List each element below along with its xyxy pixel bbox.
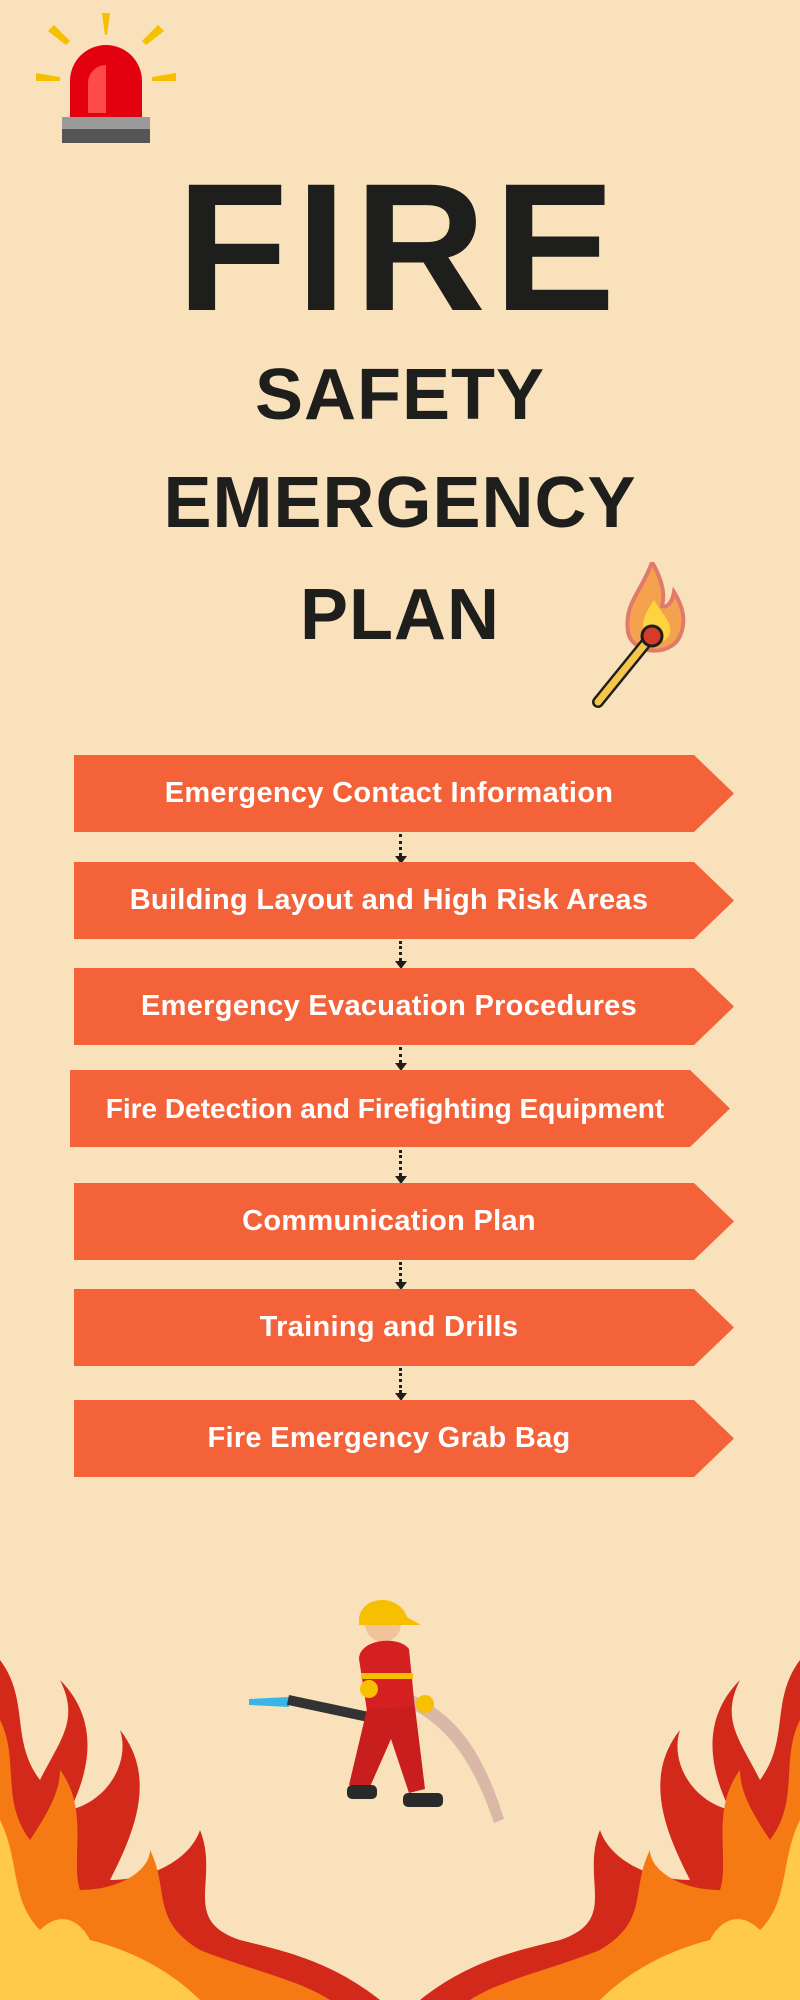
banner 7 (74, 1400, 734, 1477)
banner 5: Communication Plan (242, 1205, 536, 1237)
title: FIRE (177, 145, 623, 349)
banner 2: Building Layout and High Risk Areas (130, 884, 648, 916)
banner 1: Emergency Contact Information (165, 777, 613, 809)
illustration: firefighter (249, 1600, 504, 1823)
banner 6: Training and Drills (260, 1311, 518, 1343)
banner 4: Fire Detection and Firefighting Equipment (106, 1093, 664, 1124)
banner 3: Emergency Evacuation Procedures (141, 990, 637, 1022)
banner 1 (74, 755, 734, 832)
banner 3 (74, 968, 734, 1045)
subtitle: SAFETY (255, 355, 545, 435)
text: PLAN (300, 575, 500, 655)
banner 7: Fire Emergency Grab Bag (207, 1422, 571, 1454)
icon: burning match (592, 562, 686, 708)
banner 2 (74, 862, 734, 939)
flames left (0, 1660, 380, 2000)
banner 5 (74, 1183, 734, 1260)
banner 4 (70, 1070, 730, 1147)
icon: siren (36, 13, 176, 143)
text: EMERGENCY (163, 463, 637, 543)
flames right (420, 1660, 800, 2000)
banner 6 (74, 1289, 734, 1366)
